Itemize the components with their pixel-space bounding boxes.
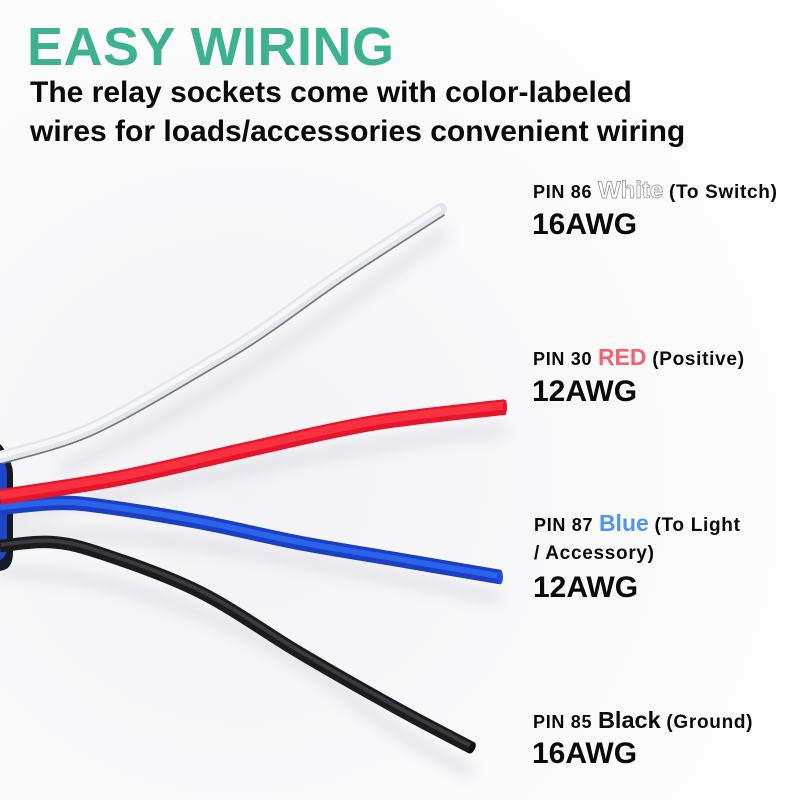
subtitle: wires for loads/accessories convenient wiring: [30, 114, 685, 148]
label: pin 86 white wire: [532, 177, 778, 241]
white wire: [0, 208, 442, 458]
label: pin 87 blue wire: [533, 510, 741, 604]
label: pin 85 black wire: PIN 85 Black (Ground): [533, 707, 753, 733]
label: pin 87 blue wire: / Accessory): [534, 543, 655, 564]
black wire: [0, 541, 477, 755]
subtitle: The relay sockets come with color-labeled: [30, 76, 632, 109]
label: pin 30 red wire: [532, 344, 745, 408]
label: pin 85 black wire: 16AWG: [532, 737, 637, 770]
label: pin 85 black wire: [532, 707, 753, 770]
title: EASY WIRING: [27, 17, 395, 77]
label: pin 86 white wire: PIN 86 White (To Switch): [533, 177, 778, 204]
label: pin 30 red wire: PIN 30 RED (Positive): [533, 344, 745, 370]
label: pin 87 blue wire: 12AWG: [533, 571, 638, 604]
label: pin 86 white wire: 16AWG: [532, 208, 637, 241]
wire shadows: [0, 232, 505, 772]
subtitle: [30, 76, 685, 148]
red wire: [0, 400, 507, 497]
blue wire: [0, 502, 503, 584]
label: pin 30 red wire: 12AWG: [532, 375, 637, 408]
label: pin 87 blue wire: PIN 87 Blue (To Light: [534, 510, 741, 536]
relay socket body: [0, 444, 13, 571]
